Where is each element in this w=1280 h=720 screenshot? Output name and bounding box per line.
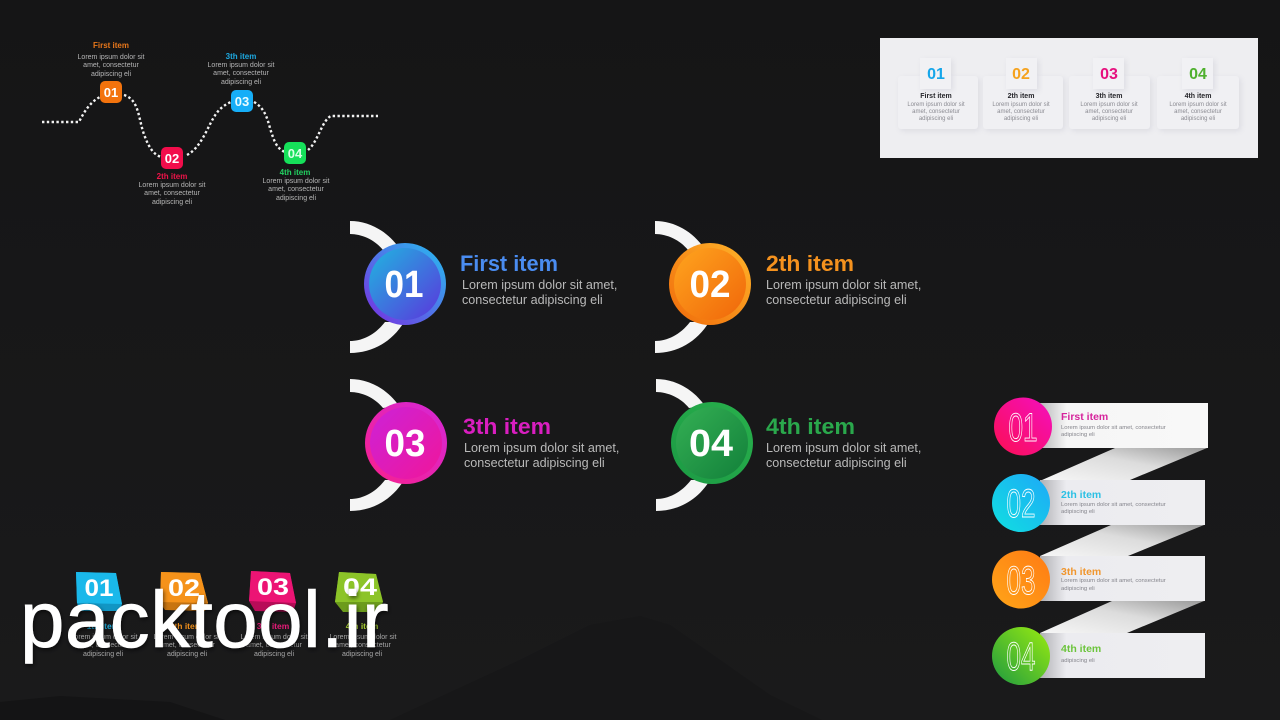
wave node 02: 2th item bbox=[157, 172, 187, 181]
card 02: 2th item bbox=[1008, 93, 1034, 100]
card 02 bbox=[983, 58, 1063, 129]
card 04 bbox=[1157, 58, 1239, 129]
cube 03: adipiscing eli bbox=[254, 651, 294, 658]
heading: 3th item bbox=[463, 414, 551, 439]
card 04: Lorem ipsum dolor sit bbox=[1169, 102, 1227, 108]
ribbon row 02: 02 bbox=[1006, 482, 1036, 526]
card 04: 04 bbox=[1189, 66, 1207, 83]
wave node 03: Lorem ipsum dolor sit bbox=[208, 62, 275, 69]
card 03: amet, consectetur bbox=[1085, 109, 1133, 115]
body: Lorem ipsum dolor sit amet, bbox=[766, 278, 921, 292]
card 02: Lorem ipsum dolor sit bbox=[992, 102, 1050, 108]
wave node 01 bbox=[78, 41, 145, 103]
panel: neumorphic cards bbox=[880, 38, 1258, 158]
cube 03 bbox=[241, 571, 308, 658]
card 03: adipiscing eli bbox=[1092, 116, 1126, 122]
background mountain silhouette bbox=[0, 616, 822, 720]
3D cube list infographic bbox=[71, 571, 397, 658]
white arcs bbox=[350, 221, 404, 353]
cube 02: 2th item bbox=[170, 621, 203, 631]
ribbon row 02 bbox=[992, 474, 1205, 532]
card 04: 4th item bbox=[1185, 93, 1211, 100]
wave node 01: 01 bbox=[104, 85, 118, 100]
heading: 2th item bbox=[766, 251, 854, 276]
card 01: 01 bbox=[927, 66, 945, 83]
ribbon row 03: adipiscing eli bbox=[1061, 586, 1095, 592]
ribbon list infographic bbox=[992, 398, 1208, 685]
cube 01: Lorem ipsum dolor sit bbox=[71, 634, 138, 641]
cube 04: 04 bbox=[343, 574, 378, 601]
cube 02 bbox=[154, 572, 221, 658]
cube 01: 1th item bbox=[87, 621, 120, 631]
body: consectetur adipiscing eli bbox=[766, 456, 907, 470]
cube 04: 4th item bbox=[346, 621, 379, 631]
cube 02: 02 bbox=[168, 575, 200, 602]
ribbon row 03: 03 bbox=[1006, 559, 1036, 603]
ribbon row 02: 2th item bbox=[1061, 489, 1101, 501]
wave node 04: adipiscing eli bbox=[276, 195, 316, 202]
white arcs bbox=[655, 221, 709, 353]
wave node 03: adipiscing eli bbox=[221, 79, 261, 86]
wave node 01: First item bbox=[93, 41, 129, 50]
wave node 04: 4th item bbox=[280, 168, 310, 177]
cube 04: Lorem ipsum dolor sit bbox=[330, 634, 397, 641]
card 03: 03 bbox=[1100, 66, 1118, 83]
heading: First item bbox=[460, 251, 558, 276]
card 01: Lorem ipsum dolor sit bbox=[907, 102, 965, 108]
wave node 04: Lorem ipsum dolor sit bbox=[263, 178, 330, 185]
card 03 bbox=[1069, 58, 1150, 129]
body: consectetur adipiscing eli bbox=[464, 456, 605, 470]
cube 02: amet, consectetur bbox=[159, 642, 215, 649]
heading: 4th item bbox=[766, 414, 855, 439]
card 02: adipiscing eli bbox=[1004, 116, 1038, 122]
cube 02: Lorem ipsum dolor sit bbox=[154, 634, 221, 641]
wave node 04: amet, consectetur bbox=[268, 186, 324, 193]
numbered circle: 03 bbox=[384, 423, 426, 465]
wave node 02: 02 bbox=[165, 151, 179, 166]
white arcs bbox=[350, 379, 404, 511]
card 01 bbox=[898, 58, 978, 129]
cube 03: 3th item bbox=[257, 621, 290, 631]
ribbon row 03 bbox=[992, 550, 1205, 608]
ribbon row 01: First item bbox=[1061, 411, 1108, 423]
ribbon row 01: adipiscing eli bbox=[1061, 432, 1095, 438]
ribbon row 04: 04 bbox=[1006, 635, 1036, 679]
body: Lorem ipsum dolor sit amet, bbox=[766, 441, 921, 455]
wave node 03: 3th item bbox=[226, 52, 256, 61]
body: consectetur adipiscing eli bbox=[766, 293, 907, 307]
card 04: amet, consectetur bbox=[1174, 109, 1222, 115]
body bbox=[462, 278, 617, 307]
wave node 02 bbox=[139, 147, 206, 206]
ribbon folds bbox=[1040, 448, 1207, 633]
cube 01: adipiscing eli bbox=[83, 651, 123, 658]
wave node 03: amet, consectetur bbox=[213, 70, 269, 77]
ribbon row 03: 3th item bbox=[1061, 566, 1101, 578]
wave node 03: 03 bbox=[235, 94, 249, 109]
card 01: amet, consectetur bbox=[912, 109, 960, 115]
main item 02 bbox=[655, 221, 921, 353]
cube 02: adipiscing eli bbox=[167, 651, 207, 658]
body bbox=[766, 441, 921, 470]
card 03: Lorem ipsum dolor sit bbox=[1080, 102, 1138, 108]
cube 01 bbox=[71, 572, 138, 658]
card 04: adipiscing eli bbox=[1181, 116, 1215, 122]
ribbon row 02: Lorem ipsum dolor sit amet, consectetur bbox=[1061, 502, 1166, 508]
ribbon row 01: Lorem ipsum dolor sit amet, consectetur bbox=[1061, 425, 1166, 431]
card 03: 3th item bbox=[1096, 93, 1122, 100]
numbered circle bbox=[669, 243, 751, 325]
main item 04 bbox=[656, 379, 921, 511]
body: Lorem ipsum dolor sit amet, bbox=[462, 278, 617, 292]
cube 01: amet, consectetur bbox=[76, 642, 132, 649]
dotted wave line bbox=[42, 95, 378, 157]
body bbox=[766, 278, 921, 307]
wave node 02: amet, consectetur bbox=[144, 190, 200, 197]
main item 03 bbox=[350, 379, 619, 511]
body bbox=[464, 441, 619, 470]
cube 03: Lorem ipsum dolor sit bbox=[241, 634, 308, 641]
ribbon row 04 bbox=[992, 627, 1205, 685]
body: Lorem ipsum dolor sit amet, bbox=[464, 441, 619, 455]
watermark: packtool.ir bbox=[20, 575, 389, 664]
body: consectetur adipiscing eli bbox=[462, 293, 603, 307]
numbered circle bbox=[365, 402, 447, 484]
ribbon row 02: adipiscing eli bbox=[1061, 509, 1095, 515]
card 02: 02 bbox=[1012, 66, 1030, 83]
card 02: amet, consectetur bbox=[997, 109, 1045, 115]
ribbon row 01 bbox=[994, 398, 1208, 456]
card 01: adipiscing eli bbox=[919, 116, 953, 122]
wave node 04: 04 bbox=[288, 146, 303, 161]
cube 04: adipiscing eli bbox=[342, 651, 382, 658]
white arcs bbox=[656, 379, 710, 511]
cube 03: 03 bbox=[257, 574, 289, 601]
ribbon row 04: adipiscing eli bbox=[1061, 658, 1095, 664]
numbered circle: 01 bbox=[384, 264, 424, 306]
ribbon row 04: 4th item bbox=[1061, 643, 1101, 655]
wave node 01: adipiscing eli bbox=[91, 71, 131, 78]
numbered circle: 04 bbox=[689, 423, 733, 465]
wave node 04 bbox=[263, 142, 330, 202]
cube 04 bbox=[330, 572, 397, 658]
numbered circle bbox=[671, 402, 753, 484]
cube 04: amet, consectetur bbox=[335, 642, 391, 649]
wave node 02: Lorem ipsum dolor sit bbox=[139, 182, 206, 189]
wave node 01: amet, consectetur bbox=[83, 62, 139, 69]
wave node 03 bbox=[208, 52, 275, 112]
main item 01 bbox=[350, 221, 617, 353]
card 01: First item bbox=[920, 93, 952, 100]
numbered circle: 02 bbox=[690, 264, 730, 306]
cube 01: 01 bbox=[84, 575, 114, 602]
ribbon row 01: 01 bbox=[1008, 406, 1038, 450]
cube 03: amet, consectetur bbox=[246, 642, 302, 649]
ribbon row 03: Lorem ipsum dolor sit amet, consectetur bbox=[1061, 578, 1166, 584]
wave timeline infographic bbox=[42, 41, 378, 206]
wave node 01: Lorem ipsum dolor sit bbox=[78, 54, 145, 61]
wave node 02: adipiscing eli bbox=[152, 199, 192, 206]
numbered circle bbox=[364, 243, 446, 325]
